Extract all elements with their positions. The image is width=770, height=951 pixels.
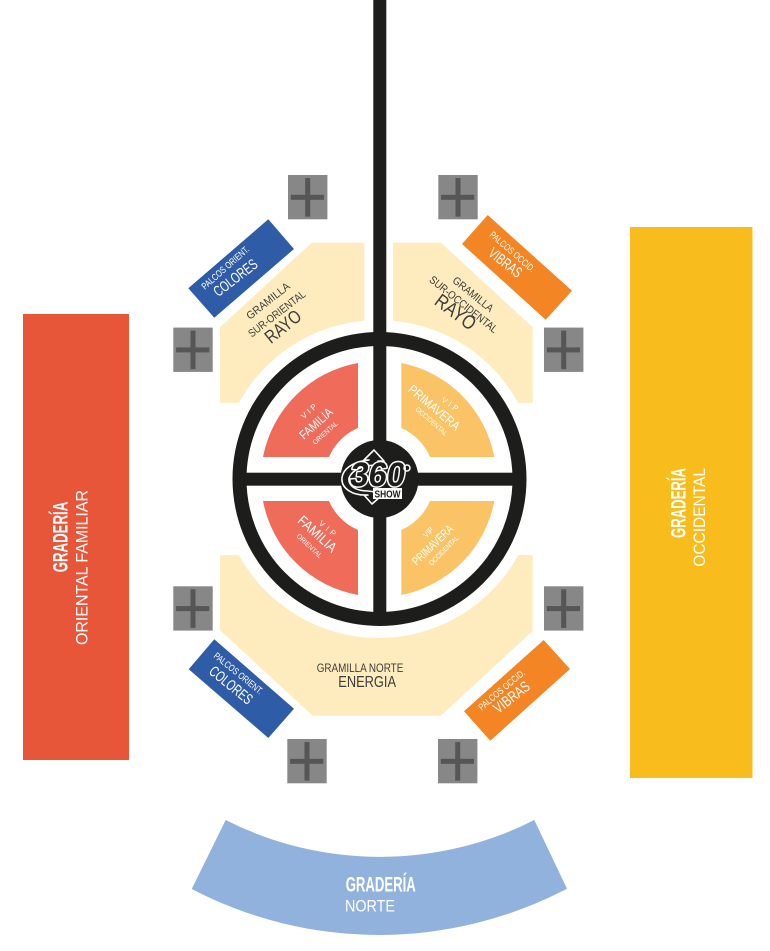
panel: vip familia oriental superior: ORIENTAL [312,420,340,446]
icon: plus upper left [173,328,213,372]
panel: gradería occidental: GRADERÍA [665,468,690,538]
icon: plus top left [288,175,327,219]
panel: palcos occid vibras inferior: VIBRAS [490,678,534,717]
panel: gramilla sur-oriental rayo: RAYO [260,305,305,347]
icon: plus bottom left [287,739,327,783]
panel: palcos occid vibras superior: PALCOS OCCID. [487,230,537,275]
icon: plus bottom right [438,739,477,783]
panel: vip primavera occidental inferior: OCCIDENTAL [428,535,461,567]
panel: vip primavera occidental superior: VIP [440,395,460,413]
icon: plus top right [438,175,478,219]
icon: plus upper right [544,328,583,372]
panel: gramilla sur-oriental rayo: GRAMILLA [244,280,293,322]
icon: plus lower right [544,586,583,631]
panel: vip familia oriental superior [263,363,358,457]
panel: vip primavera occidental inferior: PRIMAVERA [409,522,456,568]
panel: vip primavera occidental inferior [401,501,494,595]
panel: palcos orient colores inferior: PALCOS ORIENT. [211,651,265,697]
panel: palcos occid vibras superior [462,215,572,320]
panel: gradería norte: NORTE [345,897,395,916]
panel: vip familia oriental superior: FAMILIA [297,405,336,442]
panel: vip familia oriental superior: VIP [299,402,319,421]
panel: gradería norte: GRADERÍA [346,872,416,897]
panel: gradería occidental [630,227,752,778]
panel: palcos orient colores superior [188,219,294,318]
panel: vip primavera occidental superior [401,363,494,457]
panel: palcos orient colores superior: COLORES [210,256,261,300]
logo: 360 show: 360 [348,456,408,494]
panel: gradería oriental familiar: ORIENTAL FAMILIAR [72,490,91,645]
panel: gramilla sur-oriental rayo [220,243,364,403]
panel: palcos orient colores inferior: COLORES [205,663,256,708]
panel: vip primavera occidental inferior: VIP [421,525,436,540]
panel: vip familia oriental inferior: FAMILIA [295,512,341,556]
stage: circular ring with cross and runway [240,0,520,620]
panel: vip primavera occidental superior: OCCIDENTAL [414,406,449,438]
panel: gradería norte [192,820,567,935]
panel: gradería occidental: OCCIDENTAL [690,468,709,567]
panel: gramilla norte energia [220,555,533,716]
panel: gradería oriental familiar: GRADERÍA [47,502,72,572]
panel: gradería oriental familiar [23,314,129,760]
panel: gramilla norte energia: ENERGIA [338,674,397,691]
panel: palcos occid vibras superior: VIBRAS [485,245,525,282]
panel: vip familia oriental inferior [263,501,358,595]
panel: gramilla sur-oriental rayo: SUR-ORIENTAL [246,289,308,340]
panel: gramilla sur-occidental rayo: GRAMILLA [450,275,496,315]
panel: palcos occid vibras inferior: PALCOS OCCID. [477,668,528,713]
panel: vip familia oriental inferior: VIP [317,519,338,538]
panel: gramilla sur-occidental rayo [393,243,533,403]
logo: 360 show: SHOW [374,490,401,500]
icon: plus lower left [173,586,213,631]
panel: vip familia oriental inferior: ORIENTAL [295,533,323,560]
panel: gramilla sur-occidental rayo: SUR-OCCIDENTAL [427,274,500,336]
logo: 360 show [340,440,418,518]
panel: gramilla norte energia: GRAMILLA NORTE [317,661,403,675]
panel: gramilla sur-occidental rayo: RAYO [430,290,480,335]
panel: palcos occid vibras inferior [464,640,570,741]
panel: palcos orient colores inferior [189,639,294,738]
panel: vip primavera occidental superior: PRIMAVERA [405,382,463,434]
panel: palcos orient colores superior: PALCOS ORIENT. [200,244,252,292]
